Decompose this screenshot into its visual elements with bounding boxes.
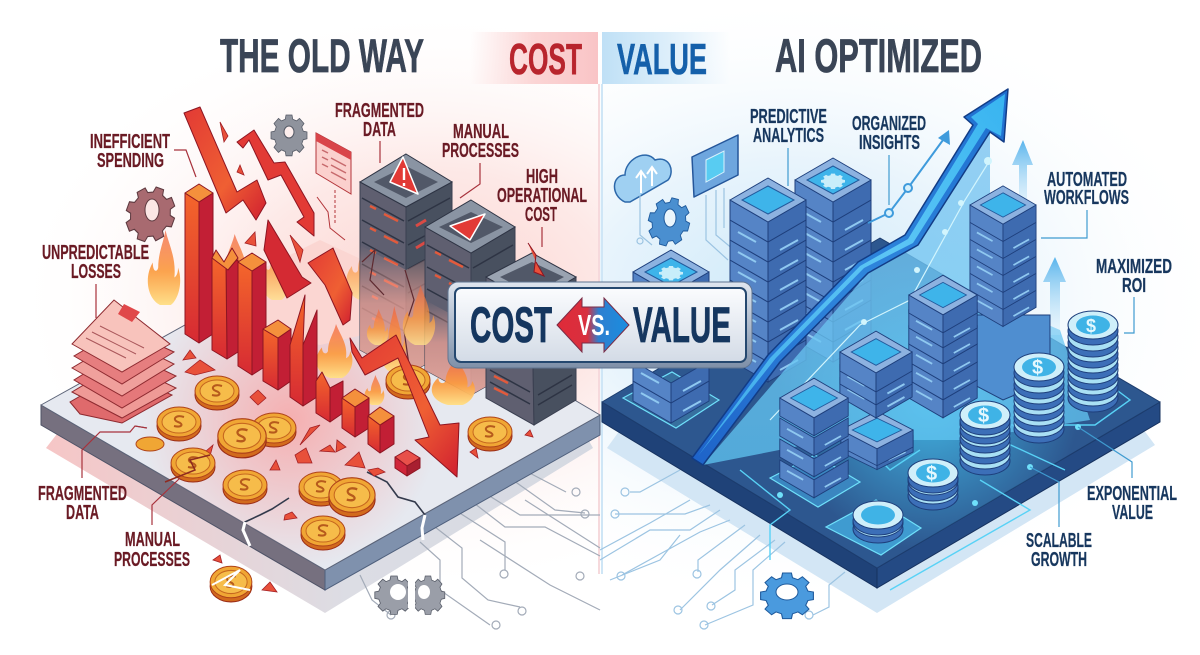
label: high operational cost [497, 166, 587, 247]
panel: blue circuit platform [602, 238, 1160, 590]
icon: bottom blue gear [761, 573, 813, 619]
flames behind [148, 230, 382, 305]
badge: cost [470, 32, 598, 84]
server 3 [486, 243, 576, 425]
icon: bottom broken gears [375, 576, 445, 614]
label: manual processes upper [442, 121, 519, 198]
coin stack: tall: $ [1032, 357, 1043, 379]
server racks [360, 154, 576, 425]
label: scalable growth: SCALABLE [1026, 530, 1092, 552]
arrow: versus double arrow: VS. [578, 310, 610, 342]
server stack: lower [780, 378, 848, 498]
label: organized insights: ORGANIZED [852, 113, 926, 135]
gold coins [136, 376, 512, 602]
coin stack: maximized roi: $ [1086, 316, 1096, 336]
label: high operational cost: OPERATIONAL [497, 185, 587, 207]
icon: blue gear [643, 193, 695, 250]
label: automated workflows: WORKFLOWS [1044, 187, 1129, 209]
label: manual processes upper: PROCESSES [442, 140, 519, 162]
coin stack: middle: $ [978, 405, 989, 427]
label: fragmented data lower: FRAGMENTED [38, 483, 127, 505]
server stack: automated [965, 186, 1050, 400]
label: fragmented data upper [335, 100, 424, 163]
coin stack: tall [1014, 353, 1064, 443]
coin stack: middle [960, 401, 1010, 475]
label: scalable growth: GROWTH [1031, 549, 1087, 571]
label: manual processes lower: PROCESSES [114, 549, 190, 571]
downward arrows [184, 107, 459, 477]
label: organized insights: INSIGHTS [859, 132, 920, 154]
arrow: main growth [692, 89, 1008, 465]
arrow: pale up right [1012, 140, 1033, 215]
label: maximized roi [1096, 256, 1172, 333]
chart: value area and trend line [692, 89, 1090, 465]
label: fragmented data upper: DATA [363, 119, 396, 141]
arrow: small trend [868, 130, 950, 223]
label: predictive analytics [750, 106, 827, 186]
coin stack: single [853, 501, 903, 543]
arrow: fragment [308, 248, 352, 325]
label: automated workflows: AUTOMATED [1047, 169, 1127, 191]
arrow: zigzag drop [237, 130, 314, 236]
label: inefficient spending [90, 131, 196, 177]
label: high operational cost: COST [525, 204, 557, 226]
label: inefficient spending: INEFFICIENT [90, 131, 170, 153]
label: organized insights [852, 113, 926, 205]
server 1 [360, 154, 452, 375]
icon: cloud [614, 155, 671, 245]
icon: pink gear [118, 180, 182, 248]
label: high operational cost: HIGH [526, 166, 558, 188]
label: scalable growth [1026, 467, 1092, 571]
server stack: front [840, 331, 913, 470]
icon: report document [316, 133, 351, 240]
arrow: broken drop one [184, 107, 266, 220]
falling bar chart [185, 184, 420, 476]
coin stack: maximized roi [1068, 311, 1118, 412]
badge: cost: COST [509, 35, 582, 84]
label: maximized roi: ROI [1122, 275, 1146, 297]
label: unpredictable losses: LOSSES [71, 261, 121, 283]
label: unpredictable losses [42, 242, 149, 318]
server stack: far left [633, 250, 709, 423]
left circuit traces [46, 425, 600, 629]
plate text: value: VALUE [633, 297, 731, 353]
label: fragmented data lower: DATA [66, 502, 99, 524]
label: exponential value: VALUE [1112, 502, 1153, 524]
panel: cracked grey platform [41, 240, 600, 590]
arrow: versus double arrow [557, 298, 629, 352]
icon: grey gear [271, 115, 307, 156]
flames front [316, 285, 475, 405]
label: inefficient spending: SPENDING [97, 150, 164, 172]
icon: paper stack [70, 300, 176, 423]
badge: value [602, 32, 730, 84]
server stack: predictive [730, 158, 871, 382]
centre plate: cost vs value [448, 282, 752, 368]
label: manual processes lower [114, 478, 190, 571]
arrow: broken segment [264, 220, 311, 298]
broken shards [183, 122, 533, 592]
label: manual processes lower: MANUAL [125, 529, 180, 551]
arrow: main drop [350, 335, 459, 477]
title: the old way: THE OLD WAY [220, 29, 424, 82]
badge: value: VALUE [617, 35, 707, 84]
label: fragmented data upper: FRAGMENTED [335, 100, 424, 122]
server stack: centre [909, 275, 977, 418]
coin stack: short: $ [926, 463, 937, 485]
label: automated workflows [1041, 169, 1129, 238]
label: predictive analytics: ANALYTICS [753, 125, 824, 147]
right circuit traces [600, 425, 1155, 629]
title: ai optimized: AI OPTIMIZED [775, 29, 982, 82]
label: manual processes upper: MANUAL [453, 121, 509, 143]
coin stack: short [908, 459, 958, 510]
label: fragmented data lower [38, 426, 147, 524]
label: predictive analytics: PREDICTIVE [750, 106, 827, 128]
label: unpredictable losses: UNPREDICTABLE [42, 242, 149, 264]
server 2 [425, 200, 515, 395]
arrow: pale up lower [1043, 257, 1066, 335]
label: exponential value [1078, 427, 1177, 524]
plate text: cost: COST [470, 297, 552, 353]
gold coin behind arrow [386, 365, 430, 399]
icon: chip [692, 135, 738, 260]
